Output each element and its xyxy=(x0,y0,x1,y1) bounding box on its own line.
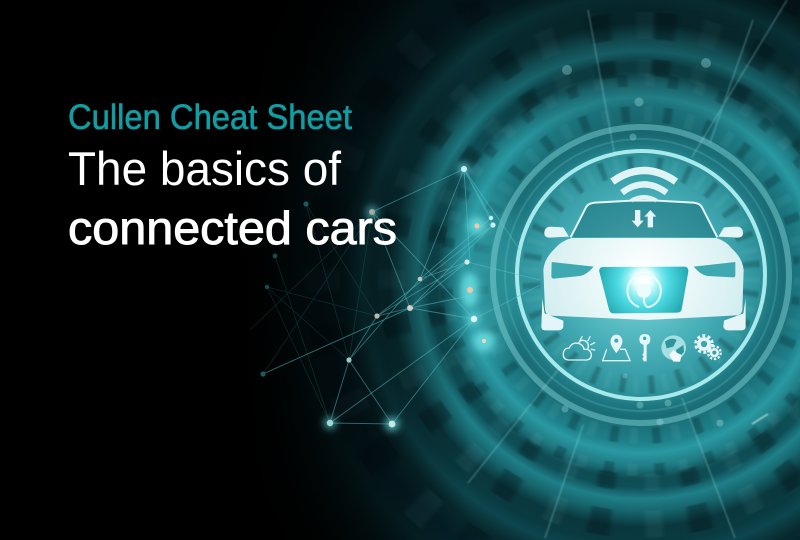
car body xyxy=(543,238,744,320)
inner segmented ring tiles xyxy=(440,75,800,476)
side mirrors xyxy=(544,227,743,238)
translucent rings around the disc xyxy=(493,127,789,423)
icon: map pin xyxy=(603,335,630,361)
connected car illustration xyxy=(541,170,746,362)
headlights xyxy=(551,262,735,279)
service icons xyxy=(563,334,721,362)
data arrows xyxy=(632,210,656,227)
pale dots on the rings xyxy=(562,58,724,426)
ring glint xyxy=(752,414,768,424)
wifi symbol xyxy=(612,170,676,201)
title block xyxy=(68,98,397,254)
icon: globe xyxy=(661,335,686,362)
icon: key xyxy=(639,334,650,361)
faint network lines xyxy=(250,204,410,423)
grille xyxy=(599,267,688,313)
left side glow xyxy=(466,193,518,363)
bright main ring xyxy=(517,151,765,399)
heading line: connected cars: connected cars xyxy=(68,202,397,254)
network lines xyxy=(263,169,540,424)
light rays xyxy=(468,0,787,538)
icon: gears xyxy=(696,336,721,359)
grille glow xyxy=(632,267,655,290)
heading line: The basics of: The basics of xyxy=(68,142,342,195)
network glows xyxy=(324,163,495,431)
car roof and windshield xyxy=(571,201,717,237)
eyebrow: Cullen Cheat Sheet: Cullen Cheat Sheet xyxy=(68,98,352,137)
network nodes xyxy=(260,166,496,427)
front wheels xyxy=(541,298,746,330)
icon: weather xyxy=(563,337,595,360)
outer segmented ring tiles xyxy=(383,13,800,538)
plug logo xyxy=(627,274,661,307)
